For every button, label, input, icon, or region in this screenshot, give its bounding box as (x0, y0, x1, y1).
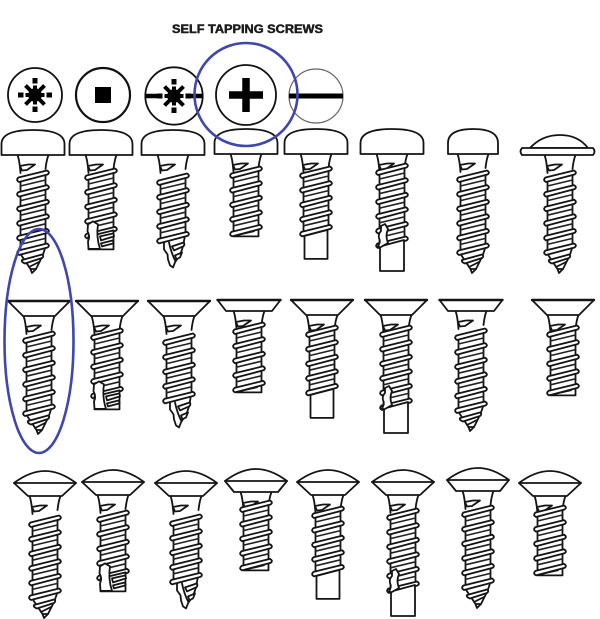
screw: oval head, point (14, 471, 76, 618)
icon: star drive head (8, 68, 62, 122)
screw: pan head, dog point (284, 129, 348, 259)
screw: pan head, notched flat end (70, 130, 132, 249)
screw: oval head, notched dog point (372, 470, 434, 616)
title: SELF TAPPING SCREWS (172, 24, 323, 36)
icon: slotted drive head (289, 69, 343, 123)
screw: flat head, dog point (291, 300, 353, 418)
screw: pan head, point (2, 130, 64, 273)
icon: square drive head (76, 68, 130, 122)
screw: flat head, notched flat end (76, 301, 138, 409)
screw: flat head, short flat end (532, 300, 594, 395)
screw: washer head, point (520, 135, 594, 273)
screw: oval head, flat end (519, 471, 581, 575)
screw: shallow oval head, flat end (225, 469, 287, 570)
callout: blue circle around phillips drive (194, 43, 298, 146)
screw: shallow oval head, point (447, 468, 509, 608)
screw: oval head, notched flat end (82, 470, 144, 591)
screw: flat head, notched dog point (365, 300, 427, 433)
icon: slotted star drive head (145, 67, 203, 125)
screw: shallow flat head, flat end (218, 300, 280, 392)
screw: pan head, drill point (142, 130, 204, 267)
screw: pan head, flat end (214, 129, 278, 236)
screw: oval head, drill point (155, 471, 217, 608)
screw: flat head, drill point (148, 301, 210, 427)
screw: oval head, dog point (297, 470, 359, 599)
screw: flat head, point (8, 301, 70, 434)
icon: phillips drive head (216, 65, 276, 125)
screw: pan head, notched dog point (360, 129, 424, 271)
callout: blue ellipse around flat head screw (4, 229, 74, 453)
screw: small pan head, point (448, 129, 498, 273)
screw: shallow flat head, long point (440, 300, 502, 431)
